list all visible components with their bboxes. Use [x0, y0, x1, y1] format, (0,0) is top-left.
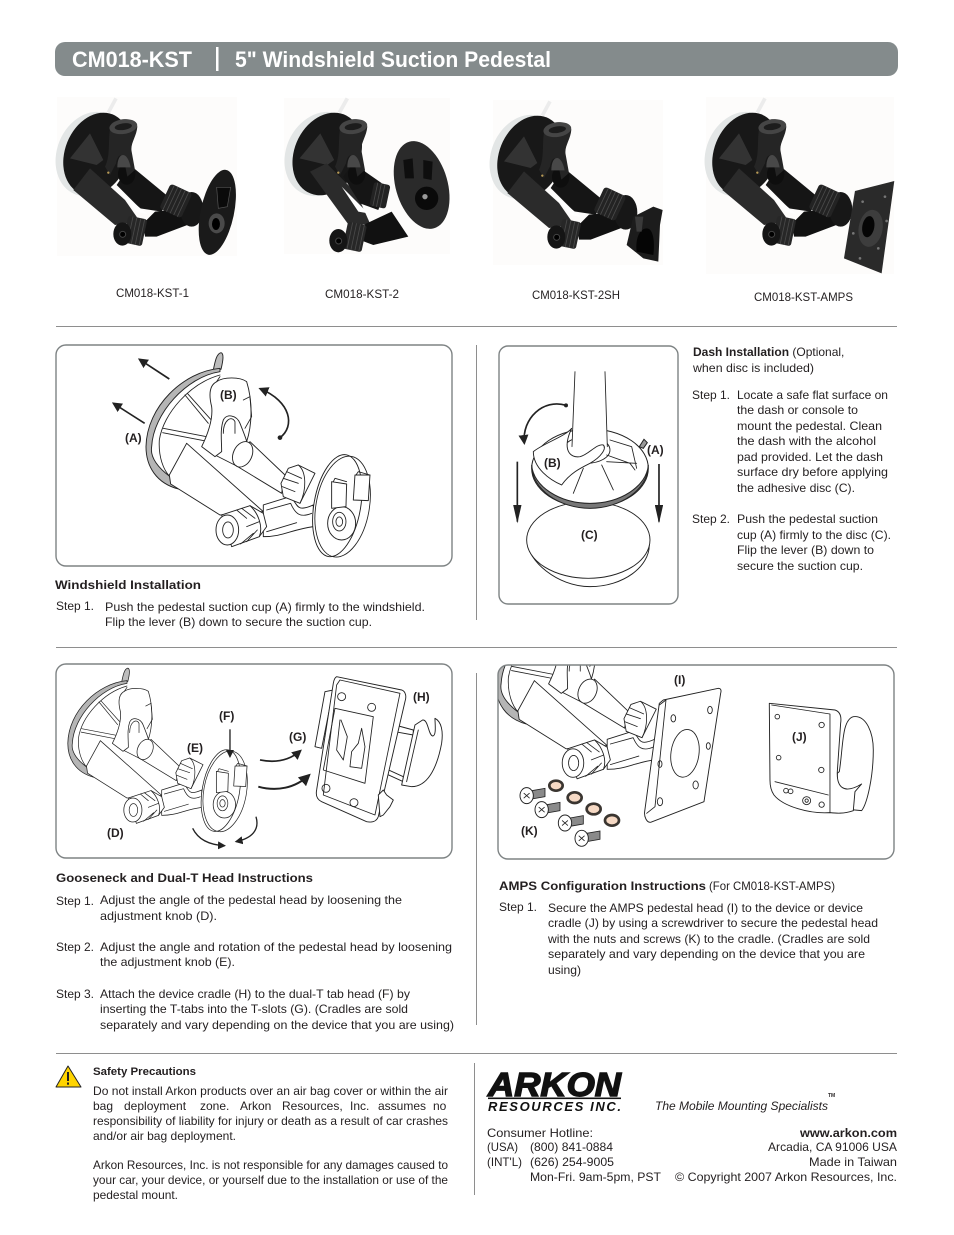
suction cup seen from above: [532, 372, 648, 508]
label I: (I): [674, 673, 685, 687]
consumer hotline contact: (800) 841-0884: [530, 1140, 613, 1154]
dash installation instructions: Flip the lever (B) down to: [737, 543, 874, 557]
gooseneck and dual-T head instructions: [56, 871, 454, 1032]
caption: CM018-KST-2: CM018-KST-2: [325, 287, 399, 301]
label A: (A): [647, 443, 664, 457]
label C: (C): [581, 528, 598, 542]
safety precautions text: bag: [93, 1099, 113, 1113]
product code: CM018-KST: [72, 47, 193, 72]
gooseneck and dual-T head instructions: Gooseneck and Dual-T Head Instructions: [56, 871, 313, 885]
safety precautions text: assumes: [378, 1099, 426, 1113]
tagline: [655, 1093, 835, 1113]
safety precautions text: Arkon: [240, 1099, 271, 1113]
consumer hotline contact: (626) 254-9005: [530, 1155, 614, 1169]
AMPS configuration instructions: [499, 879, 878, 977]
panel: dash installation diagram: [499, 346, 678, 604]
safety precautions text: pedestal mount.: [93, 1188, 178, 1202]
dash installation instructions: the dash with the alcohol: [737, 434, 876, 448]
header bar: [55, 42, 898, 76]
AMPS configuration instructions: with the nuts and screws (K) to the cradle. (Cradles are sold: [547, 932, 870, 946]
dash installation instructions: Step 2.: [692, 512, 730, 526]
company address: Arcadia, CA 91006 USA: [768, 1140, 897, 1154]
AMPS configuration instructions: separately and vary depending on the device that you are: [548, 947, 865, 961]
gooseneck and dual-T head instructions: Adjust the angle of the pedestal head by loosening the: [100, 893, 402, 907]
safety precautions text: responsibility of liability for injury or death as a result of car crashes: [93, 1114, 448, 1128]
safety precautions text: Safety Precautions: [93, 1066, 196, 1078]
safety precautions text: Resources,: [282, 1099, 343, 1113]
windshield installation instructions: [55, 578, 425, 629]
lever rotation arrow: [260, 389, 289, 440]
label K: (K): [521, 824, 538, 838]
label J: (J): [792, 730, 807, 744]
product photo: CM018-KST-2SH: [477, 100, 663, 265]
safety precautions text: no: [433, 1099, 447, 1113]
mount line art: [68, 668, 253, 835]
consumer hotline contact: Consumer Hotline:: [487, 1126, 593, 1140]
press arrows: [517, 462, 659, 522]
dash installation instructions: surface dry before applying: [737, 465, 888, 479]
rotation arrow: [524, 403, 568, 443]
icon: warning triangle: [56, 1066, 81, 1087]
caption: CM018-KST-AMPS: CM018-KST-AMPS: [754, 290, 853, 304]
dash installation instructions: Locate a safe flat surface on: [737, 388, 888, 402]
adhesive disc: [527, 502, 650, 587]
dash installation instructions: Step 1.: [692, 388, 730, 402]
gooseneck and dual-T head instructions: the adjustment knob (E).: [100, 955, 235, 969]
Arkon logo: ARKON: [487, 1066, 622, 1103]
company address: Made in Taiwan: [809, 1155, 897, 1169]
label E: (E): [187, 741, 203, 755]
AMPS plate: [645, 688, 721, 822]
label F: (F): [219, 709, 234, 723]
safety precautions text: deployment: [124, 1099, 187, 1113]
dash installation instructions: the dash or console to: [737, 403, 858, 417]
consumer hotline contact: [487, 1126, 662, 1184]
gooseneck and dual-T head instructions: Step 2.: [56, 940, 94, 954]
gooseneck and dual-T head instructions: Step 1.: [56, 894, 94, 908]
page title: 5" Windshield Suction Pedestal: [235, 47, 551, 72]
cropped mount line art: [498, 666, 657, 780]
dash installation instructions: the adhesive disc (C).: [737, 481, 855, 495]
head rotation arrows: [193, 817, 257, 846]
mount line art: [146, 353, 378, 562]
dash installation instructions: secure the suction cup.: [737, 559, 863, 573]
consumer hotline contact: (USA): [487, 1140, 518, 1154]
dash installation instructions: cup (A) firmly to the disc (C).: [737, 528, 891, 542]
dash installation instructions: mount the pedestal. Clean: [737, 419, 882, 433]
tagline: TM: [828, 1093, 835, 1099]
company address: [675, 1126, 897, 1184]
device cradle J: [769, 703, 873, 813]
AMPS configuration instructions: Step 1.: [499, 900, 537, 914]
screws and nuts: [520, 781, 619, 846]
safety precautions text: Arkon Resources, Inc. is not responsible for any damages caused to: [93, 1158, 448, 1172]
label G: (G): [289, 730, 306, 744]
AMPS configuration instructions: (For CM018-KST-AMPS): [709, 879, 835, 893]
product photo: CM018-KST-AMPS: [692, 97, 894, 274]
gooseneck and dual-T head instructions: inserting the T-tabs into the T-slots (G). (Cradles are sold: [100, 1002, 408, 1016]
dash installation instructions: Dash Installation (Optional,: [693, 345, 844, 359]
AMPS configuration instructions: AMPS Configuration Instructions: [499, 879, 706, 893]
safety precautions text: Inc.: [350, 1099, 369, 1113]
company address: © Copyright 2007 Arkon Resources, Inc.: [675, 1170, 897, 1184]
label H: (H): [413, 690, 430, 704]
safety precautions text: Do not install Arkon products over an air bag cover or within the air: [93, 1084, 448, 1098]
gooseneck and dual-T head instructions: Adjust the angle and rotation of the pedestal head by loosening: [100, 940, 452, 954]
AMPS configuration instructions: Secure the AMPS pedestal head (I) to the device or device: [548, 901, 863, 915]
arrow to tab head: [228, 729, 232, 757]
panel: AMPS configuration diagram: [497, 664, 895, 860]
gooseneck and dual-T head instructions: adjustment knob (D).: [100, 909, 217, 923]
dash installation instructions: pad provided. Let the dash: [737, 450, 883, 464]
company address: www.arkon.com: [799, 1126, 897, 1140]
label A: (A): [125, 431, 142, 445]
gooseneck and dual-T head instructions: Attach the device cradle (H) to the dual-T tab head (F) by: [100, 987, 410, 1001]
label D: (D): [107, 826, 124, 840]
windshield installation instructions: Push the pedestal suction cup (A) firmly to the windshield.: [105, 600, 425, 614]
safety precautions text: zone.: [200, 1099, 229, 1113]
panel: gooseneck and dual-T head diagram: [56, 664, 452, 858]
label B: (B): [544, 456, 561, 470]
windshield installation instructions: Windshield Installation: [55, 578, 201, 592]
product photo: CM018-KST-2: [272, 98, 459, 254]
caption: CM018-KST-1: CM018-KST-1: [116, 286, 189, 300]
safety precautions text: [93, 1066, 448, 1202]
label B: (B): [220, 388, 237, 402]
Arkon logo: RESOURCES INC.: [488, 1099, 621, 1114]
product photo: CM018-KST-1: [43, 97, 243, 258]
device cradle: [315, 677, 442, 822]
push arrows: [113, 359, 169, 423]
dash installation instructions: when disc is included): [692, 361, 814, 375]
windshield installation instructions: Step 1.: [56, 599, 94, 613]
windshield installation instructions: Flip the lever (B) down to secure the suction cup.: [105, 615, 372, 629]
Arkon logo: [487, 1066, 622, 1114]
gooseneck and dual-T head instructions: separately and vary depending on the device that you are using): [100, 1018, 454, 1032]
caption: CM018-KST-2SH: CM018-KST-2SH: [532, 288, 620, 302]
dash installation instructions: Push the pedestal suction: [737, 512, 878, 526]
safety precautions text: your car, your device, or yourself due to the installation or use of the: [93, 1173, 448, 1187]
safety precautions text: and/or air bag deployment.: [93, 1129, 236, 1143]
AMPS configuration instructions: using): [548, 963, 581, 977]
gooseneck and dual-T head instructions: Step 3.: [56, 987, 94, 1001]
AMPS configuration instructions: cradle (J) by using a screwdriver to secure the pedestal head: [548, 916, 878, 930]
insertion arrows: [258, 751, 309, 789]
consumer hotline contact: (INT'L): [487, 1155, 522, 1169]
dash installation instructions: [692, 345, 891, 573]
panel: windshield installation diagram: [56, 345, 452, 566]
consumer hotline contact: Mon-Fri. 9am-5pm, PST: [530, 1170, 662, 1184]
tagline: The Mobile Mounting Specialists: [655, 1099, 828, 1113]
